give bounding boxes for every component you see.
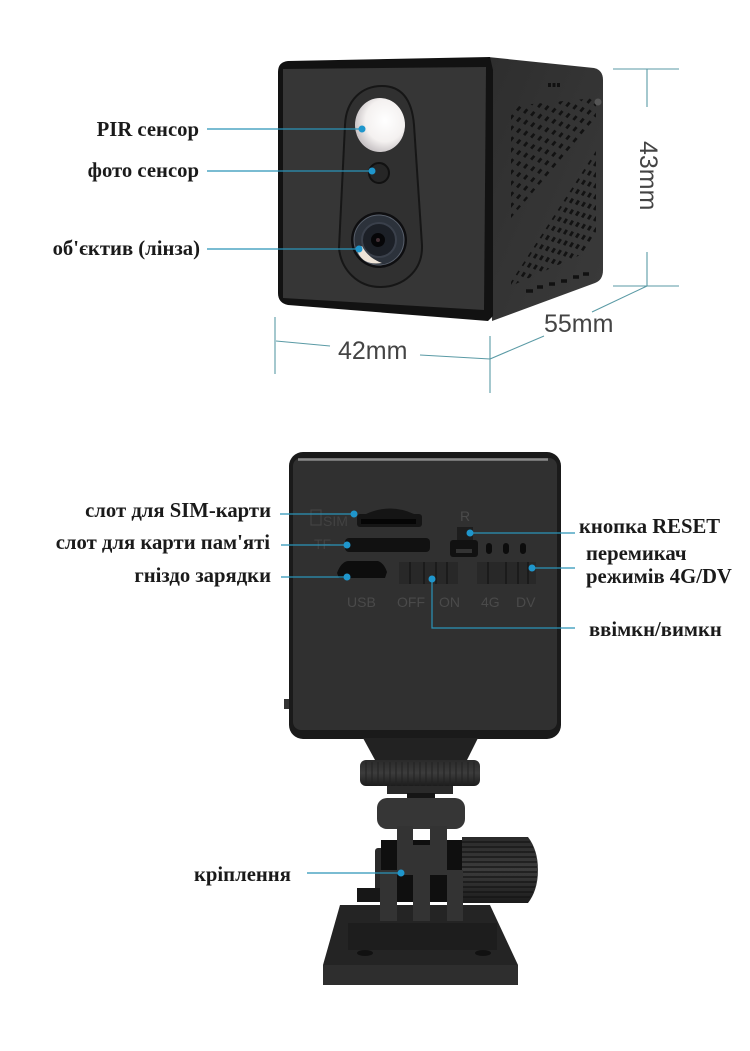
- PIR dome: [355, 98, 405, 152]
- callout: mode switch: перемикач: [586, 543, 687, 565]
- mount neck: [363, 738, 478, 760]
- callout: mode switch: режимів 4G/DV: [586, 566, 732, 588]
- side vents upper: [511, 98, 596, 218]
- reset button: [450, 527, 478, 557]
- SIM label: SIM: [323, 513, 348, 529]
- port labels: DV: [516, 594, 536, 610]
- port labels: 4G: [481, 594, 500, 610]
- dimension: 42mm: 42mm: [338, 337, 407, 365]
- callout: photo sensor: [88, 160, 376, 182]
- side bottom slots: [526, 274, 589, 291]
- SIM label: [311, 510, 348, 529]
- callout: charging port: [134, 565, 350, 587]
- callout: power switch: [428, 576, 722, 641]
- callout: lens: [53, 238, 362, 260]
- callout: charging port: гніздо зарядки: [134, 565, 271, 587]
- callout: mount: кріплення: [194, 864, 291, 886]
- top highlight: [298, 458, 548, 461]
- callout: power switch: ввімкн/вимкн: [589, 619, 722, 641]
- dimension: 42mm: [275, 317, 490, 393]
- base top block: [348, 923, 497, 956]
- indicator holes: [489, 546, 523, 551]
- adjustment knob: [462, 837, 538, 903]
- callout: reset button: кнопка RESET: [579, 516, 720, 538]
- mount ring: [360, 760, 480, 794]
- dimension: 55mm: [490, 286, 647, 359]
- callout: photo sensor: фото сенсор: [88, 160, 199, 182]
- power switch: [399, 562, 458, 584]
- callout: reset button: [466, 516, 720, 538]
- mode switch: [477, 562, 536, 584]
- dimension: 43mm: [613, 69, 679, 286]
- dimension: 43mm: 43mm: [634, 141, 662, 210]
- callout: memory card slot: слот для карти пам'яті: [56, 532, 270, 554]
- port labels: ON: [439, 594, 460, 610]
- camera body side face: [488, 57, 603, 321]
- light sensor: [369, 163, 389, 183]
- lens: [351, 212, 407, 268]
- mount arms: [380, 826, 463, 921]
- callout: mount: [194, 864, 404, 886]
- callout: PIR sensor: PIR сенсор: [97, 119, 199, 141]
- callout: mode switch: [528, 543, 732, 588]
- side reset dot: [594, 98, 602, 106]
- back body: [289, 452, 561, 739]
- callout: lens: об'єктив (лінза): [53, 238, 200, 260]
- reset label: R: [460, 508, 470, 524]
- port labels: [347, 594, 536, 610]
- camera front panel: [283, 67, 486, 310]
- mount axle: [375, 840, 462, 902]
- callout: PIR sensor: [97, 119, 366, 141]
- sensor pill: [339, 86, 422, 287]
- mount pivot disc: [377, 793, 465, 829]
- callout: SIM slot: слот для SIM-карти: [85, 500, 271, 522]
- SIM slot: [357, 508, 422, 527]
- camera back view: [284, 452, 561, 985]
- camera front view: [278, 57, 603, 321]
- callout: SIM slot: [85, 500, 358, 522]
- TF label: TF: [314, 536, 331, 552]
- dimension: 55mm: 55mm: [544, 310, 613, 338]
- back panel: [293, 458, 557, 730]
- side vents lower: [511, 151, 596, 284]
- camera front frame: [278, 57, 493, 321]
- side button: [284, 699, 290, 709]
- mount base bracket: [323, 905, 518, 985]
- base clip: [357, 888, 380, 902]
- TF slot: [345, 538, 430, 552]
- port labels: OFF: [397, 594, 425, 610]
- side small holes: [548, 83, 560, 87]
- USB port: [337, 561, 387, 578]
- port labels: USB: [347, 594, 376, 610]
